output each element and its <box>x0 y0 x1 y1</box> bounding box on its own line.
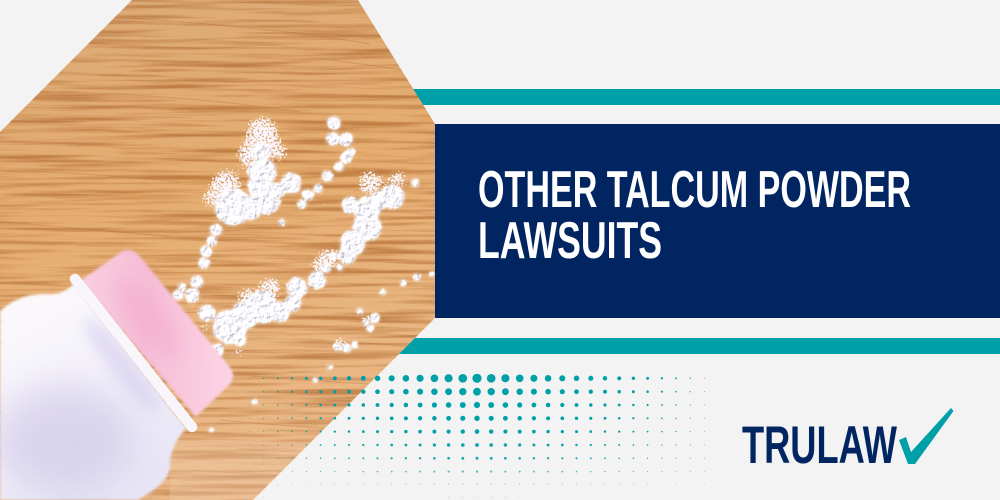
logo wordmark: TRULAW <box>742 416 897 475</box>
powder speckle haze <box>198 116 415 371</box>
title text: LAWSUITS <box>478 212 662 270</box>
bottle cap shade <box>119 285 177 352</box>
logo check mark <box>899 408 954 464</box>
powder cluster: upper left <box>198 144 301 268</box>
TruLaw logo <box>742 408 954 475</box>
powder cluster: lower main spill <box>173 272 434 432</box>
wood table surface <box>0 0 436 500</box>
halftone dot pattern <box>249 374 705 498</box>
title text <box>478 161 911 270</box>
bottle neck ring <box>75 279 192 427</box>
top teal bar <box>410 89 1000 105</box>
bottle cap <box>80 250 233 417</box>
title panel <box>435 124 1000 318</box>
spilled powder <box>173 116 434 432</box>
powder cluster: right <box>321 179 419 273</box>
photo: talcum powder bottle on wooden table <box>0 0 436 500</box>
powder trail: centre dots <box>279 116 355 225</box>
bottle body <box>0 284 186 500</box>
lower teal bar <box>398 338 1000 354</box>
